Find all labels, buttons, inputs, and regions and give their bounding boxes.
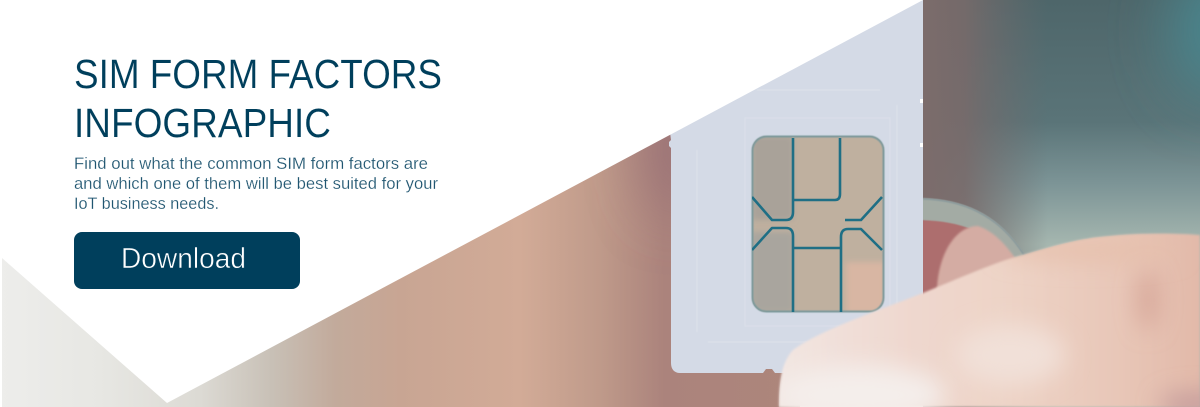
title: SIM FORM FACTORS [74,51,442,97]
thumb flesh [923,220,969,294]
description text: IoT business needs. [74,194,219,213]
description text [74,154,438,213]
chip contact lines [752,138,882,312]
white panel [2,0,923,403]
photo: finger in the foreground [775,234,1200,407]
title [74,51,442,146]
chip pad tones [752,136,793,220]
photo: thumb behind the card [923,198,1023,294]
card body [669,0,923,400]
photo: teal backdrop [923,0,1200,407]
download button: Download [121,243,246,275]
SIM chip [752,136,886,314]
download button [74,232,300,289]
description text: Find out what the common SIM form factors are [74,154,428,173]
background: blurred photo [2,134,800,407]
thumb nail edge [923,198,1022,257]
SIM card [669,0,923,400]
title: INFOGRAPHIC [74,100,331,146]
description text: and which one of them will be best suited for your [74,174,438,193]
card punch-out outlines [697,90,897,342]
